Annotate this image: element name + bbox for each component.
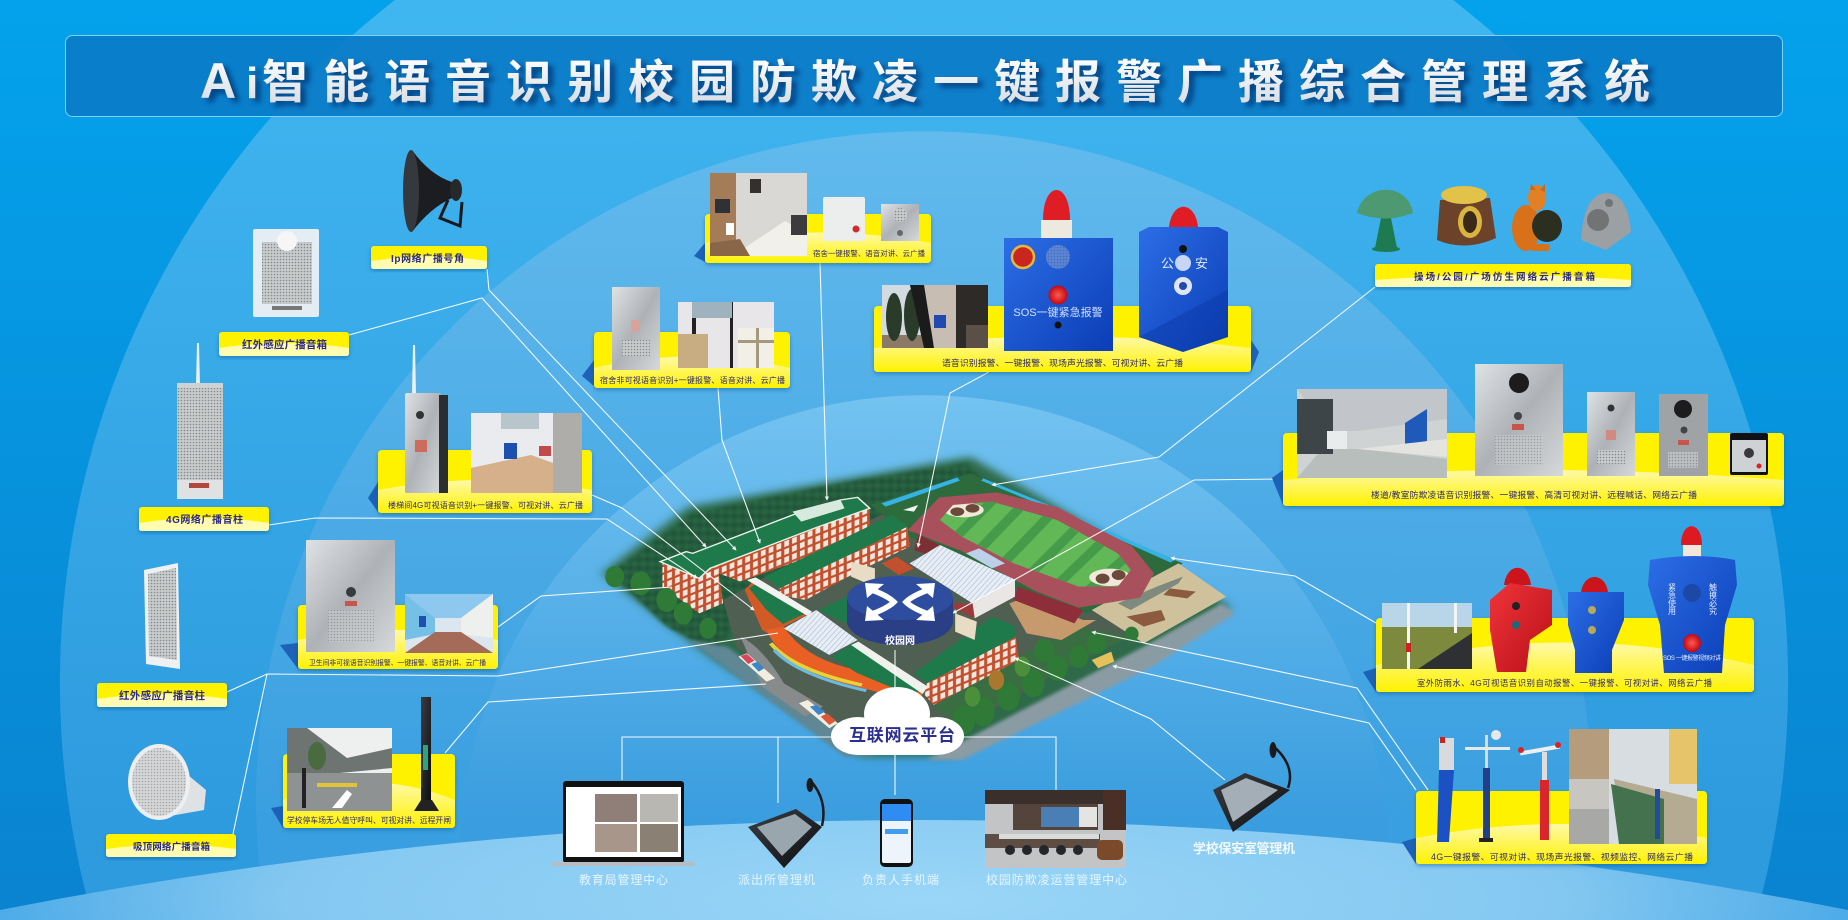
smartphone	[880, 799, 913, 867]
dorm photo	[678, 302, 774, 368]
title: i	[246, 59, 258, 108]
label: 4G column: 4G网络广播音柱	[166, 513, 243, 526]
forest belt	[610, 463, 1014, 653]
parking photo	[287, 728, 392, 811]
title: A	[200, 53, 236, 109]
door station	[1730, 433, 1768, 475]
trees	[605, 566, 1139, 735]
caption: 宿舍非可视语音识别+一键报警、语音对讲、云广播	[600, 375, 785, 385]
hub label: 校园网	[885, 634, 915, 647]
squirrel speaker	[1512, 184, 1562, 251]
corridor photo	[1297, 389, 1447, 478]
network hub	[847, 576, 953, 647]
caption: 学校停车场无人值守呼叫、可视对讲、远程开闸	[287, 815, 451, 825]
infrared wall speaker	[253, 229, 319, 317]
metal panel	[612, 287, 660, 370]
label: ceiling speaker	[106, 834, 236, 857]
metal panel with camera	[1659, 394, 1708, 476]
panel: corridor classroom	[1272, 364, 1784, 506]
infrared column speaker	[144, 563, 180, 669]
caption: 卫生间非可视语音识别报警、一键报警、语音对讲、云广播	[309, 658, 486, 667]
caption: 室外防雨水、4G可视语音识别自动报警、一键报警、可视对讲、网络云广播	[1417, 678, 1713, 688]
corridor photo	[405, 594, 493, 653]
football field	[940, 502, 1131, 587]
label: infrared speaker	[219, 332, 349, 356]
label: infrared column: 红外感应广播音柱	[119, 689, 206, 702]
south-east building	[925, 637, 1019, 705]
horn speaker	[403, 150, 462, 232]
large blue alarm box: 触摸必究	[1708, 582, 1718, 616]
large blue alarm box	[1648, 526, 1737, 673]
label: horn	[371, 246, 487, 269]
rainbow curved building	[766, 627, 923, 703]
panel: 4G poles	[1402, 729, 1707, 864]
police station console	[748, 778, 824, 868]
large blue alarm box: 紧急使用	[1668, 583, 1676, 616]
left building	[745, 578, 810, 640]
metal intercom	[881, 204, 919, 241]
cloud platform: 互联网云平台	[849, 725, 956, 745]
road	[740, 637, 823, 717]
panel: dormitory non-visual	[582, 287, 790, 388]
bionic speakers	[1357, 184, 1631, 252]
label: ceiling speaker: 吸顶网络广播音箱	[133, 841, 210, 853]
security room console	[1213, 742, 1290, 832]
label: operations center: 校园防欺凌运营管理中心	[986, 872, 1127, 887]
blue stands	[881, 477, 960, 507]
caption: 语音识别报警、一键报警、现场声光报警、可视对讲、云广播	[942, 357, 1183, 368]
hub arrows	[865, 583, 935, 621]
campus aerial view	[602, 457, 1235, 760]
caption: 楼道/教室防欺凌语音识别报警、一键报警、高清可视对讲、远程喊话、网络云广播	[1371, 489, 1697, 500]
plaza	[1092, 563, 1226, 643]
label: police station: 派出所管理机	[738, 872, 815, 887]
panel: voice recognition alarm	[874, 190, 1259, 372]
rock speaker	[1581, 193, 1631, 250]
site photo	[882, 285, 988, 348]
label: principal mobile: 负责人手机端	[862, 873, 939, 887]
antenna device	[405, 345, 448, 493]
blue post	[1437, 737, 1454, 842]
label: horn: Ip网络广播号角	[391, 252, 464, 265]
police alarm box	[1139, 207, 1228, 352]
ground	[723, 513, 1139, 727]
label: security room: 学校保安室管理机	[1193, 841, 1295, 856]
lower green roof	[832, 643, 923, 697]
laptop	[551, 781, 695, 866]
ceiling speaker	[128, 744, 206, 820]
coloured buses	[738, 652, 1114, 728]
label: bionic speakers: 操场/公园/广场仿生网络云广播音箱	[1414, 271, 1595, 283]
roads	[927, 603, 1235, 760]
SOS alarm box: SOS一键紧急报警	[1013, 305, 1103, 319]
panel: stairwell 4G	[368, 345, 592, 513]
field lawn	[871, 473, 1183, 613]
connector lines	[227, 263, 1428, 834]
red pole	[1518, 742, 1561, 840]
metal panel	[306, 540, 395, 652]
title banner	[66, 36, 1782, 116]
4G column speaker	[177, 343, 223, 499]
panel: outdoor waterproof	[1363, 526, 1754, 692]
site photo	[1569, 729, 1697, 844]
south-east lawn	[933, 627, 1131, 727]
label: infrared column	[97, 683, 227, 707]
blue alarm box	[1568, 577, 1624, 673]
panel: parking	[271, 697, 455, 828]
large blue alarm box: SOS 一键报警视频对讲	[1663, 654, 1721, 662]
panel: restroom	[280, 540, 498, 669]
label: education bureau: 教育局管理中心	[579, 872, 668, 887]
white alarm box	[823, 197, 865, 241]
title: 智能语音识别校园防欺凌一键报警广播综合管理系统	[262, 56, 1665, 108]
terrace	[1009, 597, 1096, 640]
large metal panel	[1475, 364, 1563, 476]
roadside photo	[1382, 603, 1472, 669]
caption: 宿舍一键报警、语音对讲、云广播	[813, 249, 926, 258]
panel: dormitory one-key alarm	[694, 173, 931, 263]
label: bionic speakers	[1375, 264, 1631, 287]
campus base	[602, 457, 1231, 757]
label: infrared speaker: 红外感应广播音箱	[242, 338, 328, 351]
track	[910, 493, 1152, 607]
gate post	[414, 697, 439, 811]
mushroom speaker	[1357, 190, 1413, 252]
north building	[662, 508, 870, 613]
caption: 楼梯间4G可视语音识别+一键报警、可视对讲、云广播	[388, 500, 583, 510]
cloud platform	[831, 687, 964, 755]
police alarm box: 公安	[1161, 256, 1208, 271]
control room photo	[985, 790, 1126, 868]
red alarm box	[1490, 568, 1552, 672]
middle building	[780, 527, 910, 600]
caption: 4G一键报警、可视对讲、现场声光报警、视频监控、网络云广播	[1431, 851, 1693, 862]
stairs photo	[471, 413, 582, 493]
gym	[972, 580, 1015, 618]
red hall	[1014, 587, 1083, 623]
camera pole	[1465, 730, 1510, 842]
metal panel	[1587, 392, 1635, 476]
label: 4G column	[139, 507, 269, 531]
SOS alarm box	[1004, 190, 1113, 351]
dorm photo	[710, 173, 807, 256]
stump speaker	[1437, 186, 1496, 246]
